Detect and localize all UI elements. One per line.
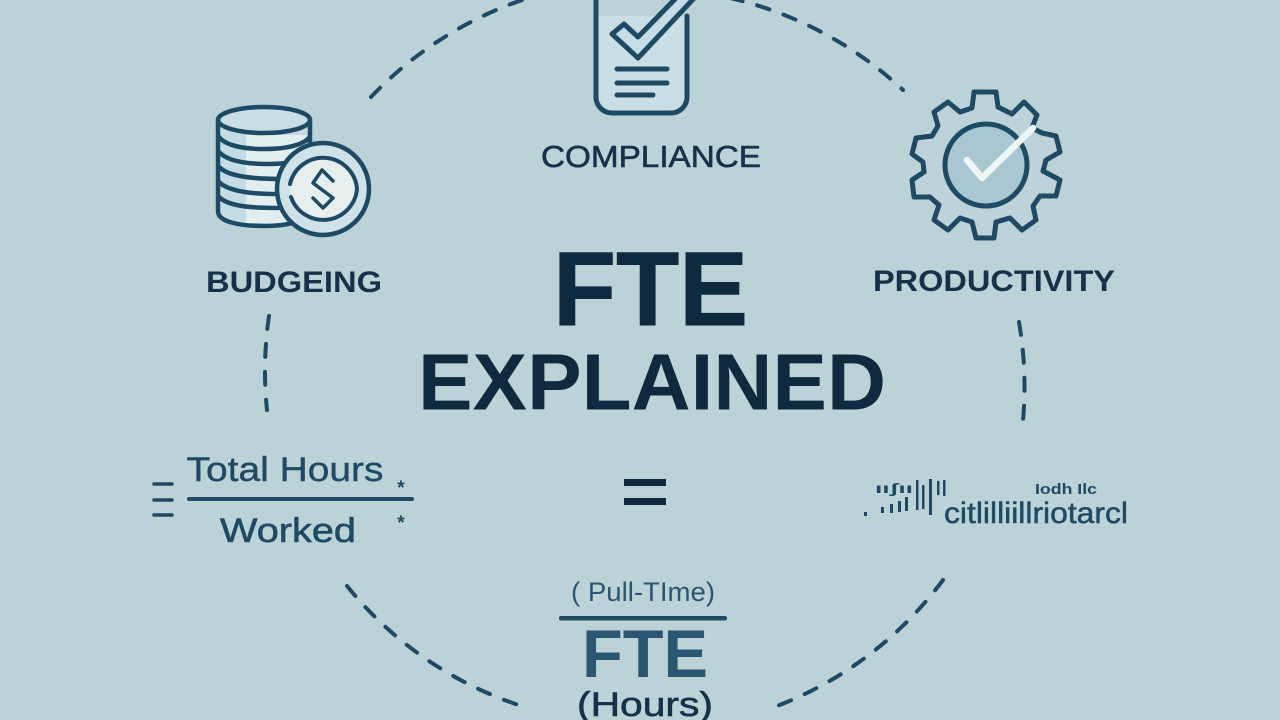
title: Explained: EXPLAINED — [418, 338, 886, 426]
formula: total hours worked — [154, 451, 414, 550]
formula: total hours worked: * — [397, 513, 405, 534]
icon: coin stack with dollar coin — [218, 107, 369, 235]
asterisks: * — [397, 478, 405, 499]
icon: productivity gear with check — [912, 92, 1060, 238]
dashed cycle ring — [265, 0, 1025, 708]
numerator: Total Hours — [186, 451, 384, 489]
garbled formula text — [864, 479, 1128, 530]
triple bar glyph — [154, 484, 172, 515]
title: FTE: FTE — [553, 231, 748, 348]
lower main fragment: citlilliillriotarcl — [944, 497, 1128, 530]
label: productivity: PRODUCTIVITY — [873, 265, 1115, 298]
label: budgeting: BUDGEING — [206, 266, 382, 299]
upper right fragment: Iodh Ilc — [1035, 481, 1097, 498]
icon: compliance clipboard with check — [596, 0, 698, 113]
upper caption: ( Pull-TIme) — [571, 577, 715, 607]
label: compliance: COMPLIANCE — [541, 139, 761, 174]
equals sign — [624, 479, 666, 505]
formula: full-time FTE hours — [559, 577, 727, 720]
tall scrambled marks — [864, 479, 946, 516]
upper left fragment: ııʃıı — [875, 480, 913, 496]
fraction bar — [559, 616, 727, 620]
denominator: Worked — [220, 512, 356, 550]
FTE: FTE — [582, 616, 708, 692]
fraction bar — [187, 497, 414, 501]
